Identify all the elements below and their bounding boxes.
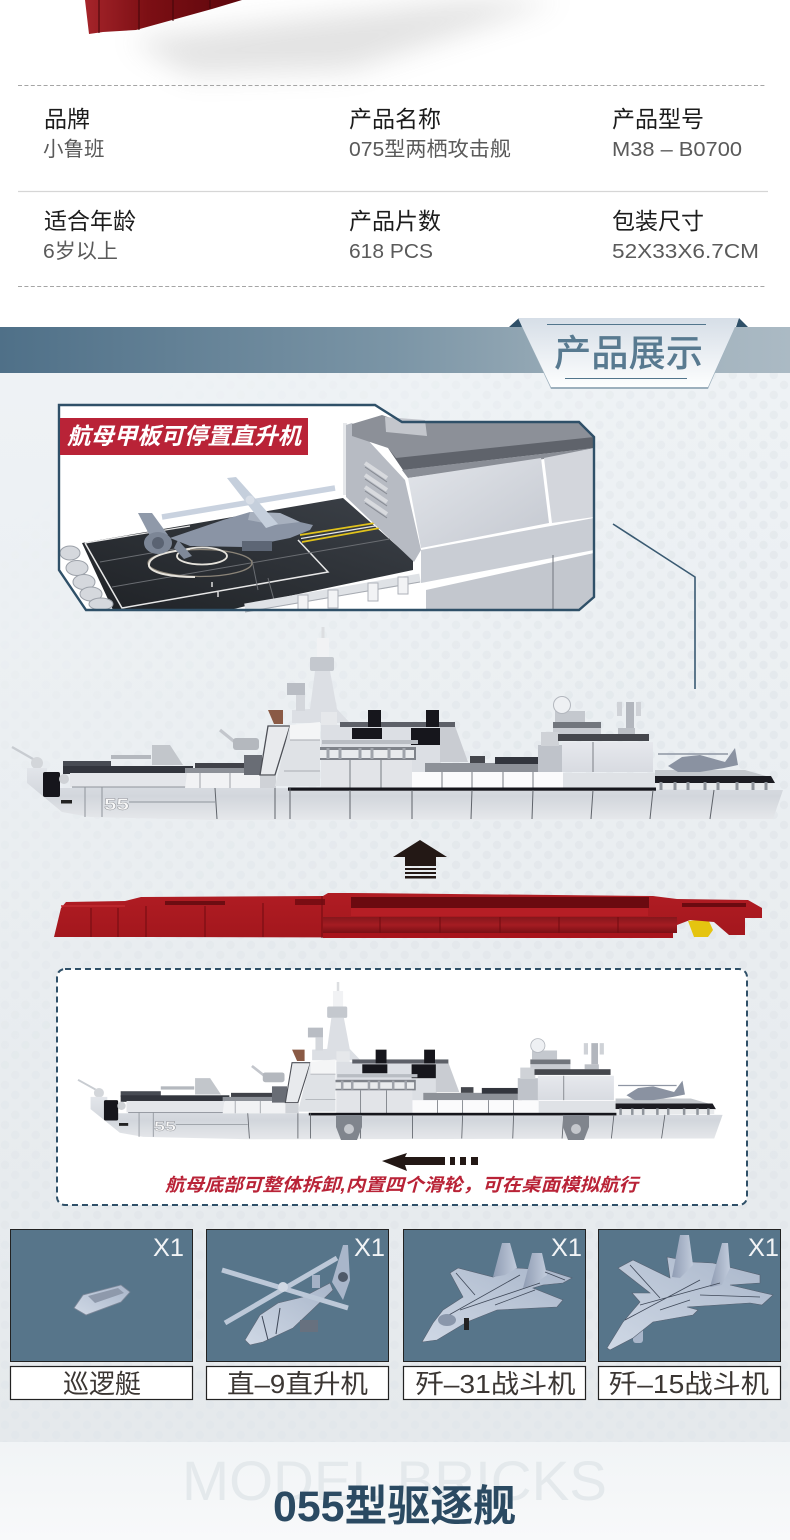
spec: package size: 包装尺寸 [612, 208, 704, 234]
ship without base: 55 [154, 1118, 176, 1134]
card: J-31 fighter [404, 1230, 586, 1400]
label: 直–9直升机 [227, 1369, 368, 1399]
card: Z-9 helicopter: X1 [354, 1234, 385, 1262]
panel: showcase background [0, 373, 790, 1442]
callout label: 航母甲板可停置直升机 [67, 423, 303, 449]
spec: model number [612, 106, 742, 161]
panel: detachable base [57, 969, 747, 1205]
wheel left [336, 1115, 362, 1140]
panel: product specs [18, 86, 768, 286]
wheel right [563, 1115, 589, 1140]
label [206, 1366, 388, 1400]
ship without base [78, 982, 723, 1140]
label: 歼–31战斗机 [416, 1369, 576, 1399]
card: Z-9 helicopter [206, 1230, 388, 1400]
icon: helicopter on deck [138, 477, 335, 559]
panel: footer heading [0, 1442, 790, 1540]
icon: boat [74, 1285, 130, 1315]
spec: brand: 品牌 [44, 106, 90, 132]
callout label [60, 418, 308, 455]
red lower hull [54, 893, 762, 938]
label: 巡逻艇 [63, 1369, 141, 1399]
assembled ship [12, 627, 783, 820]
section header band [0, 318, 790, 389]
leader line [613, 524, 695, 689]
caption: 航母底部可整体拆卸,内置四个滑轮，可在桌面模拟航行 [165, 1175, 641, 1195]
assembled ship: 55 [104, 795, 129, 814]
icon: helicopter [222, 1245, 350, 1345]
heading badge [518, 318, 739, 389]
callout: helicopter deck detail [59, 405, 594, 612]
superstructure [343, 415, 594, 610]
spec: piece count [349, 208, 441, 263]
spec: age: 6岁以上 [43, 240, 118, 263]
icon: badge corner triangles [509, 318, 748, 327]
deck [82, 498, 413, 610]
icon: J-15 [607, 1235, 773, 1350]
spec: piece count: 产品片数 [349, 208, 441, 234]
spec: package size: 52X33X6.7CM [612, 240, 759, 263]
watermark: MODEL BRICKS [182, 1449, 607, 1512]
label: 歼–15战斗机 [609, 1369, 769, 1399]
heading badge: 产品展示 [554, 333, 703, 374]
product photo: red hull bow [85, 0, 560, 75]
card: patrol boat: X1 [153, 1234, 184, 1262]
icon: J-31 [422, 1243, 572, 1342]
card: J-15 fighter: X1 [748, 1234, 779, 1262]
title: 055型驱逐舰 [273, 1483, 516, 1531]
label [10, 1366, 192, 1400]
arrow: up [393, 840, 447, 878]
spec: model number: 产品型号 [612, 106, 704, 132]
yellow wheel [688, 919, 713, 937]
card: patrol boat [10, 1230, 192, 1400]
spec: piece count: 618 PCS [349, 240, 433, 263]
frame [59, 405, 594, 610]
spec: product name: 075型两栖攻击舰 [349, 138, 511, 161]
card: J-31 fighter: X1 [551, 1234, 582, 1262]
spec: product name [349, 106, 511, 161]
spec: package size [612, 208, 759, 263]
rollers [60, 546, 420, 612]
spec: age [43, 208, 136, 263]
spec: brand [43, 106, 104, 161]
spec: product name: 产品名称 [349, 106, 441, 132]
spec: model number: M38 – B0700 [612, 138, 742, 161]
card: J-15 fighter [598, 1230, 780, 1400]
spec: brand: 小鲁班 [43, 138, 104, 161]
arrow: left [382, 1153, 478, 1171]
spec: age: 适合年龄 [44, 208, 136, 234]
